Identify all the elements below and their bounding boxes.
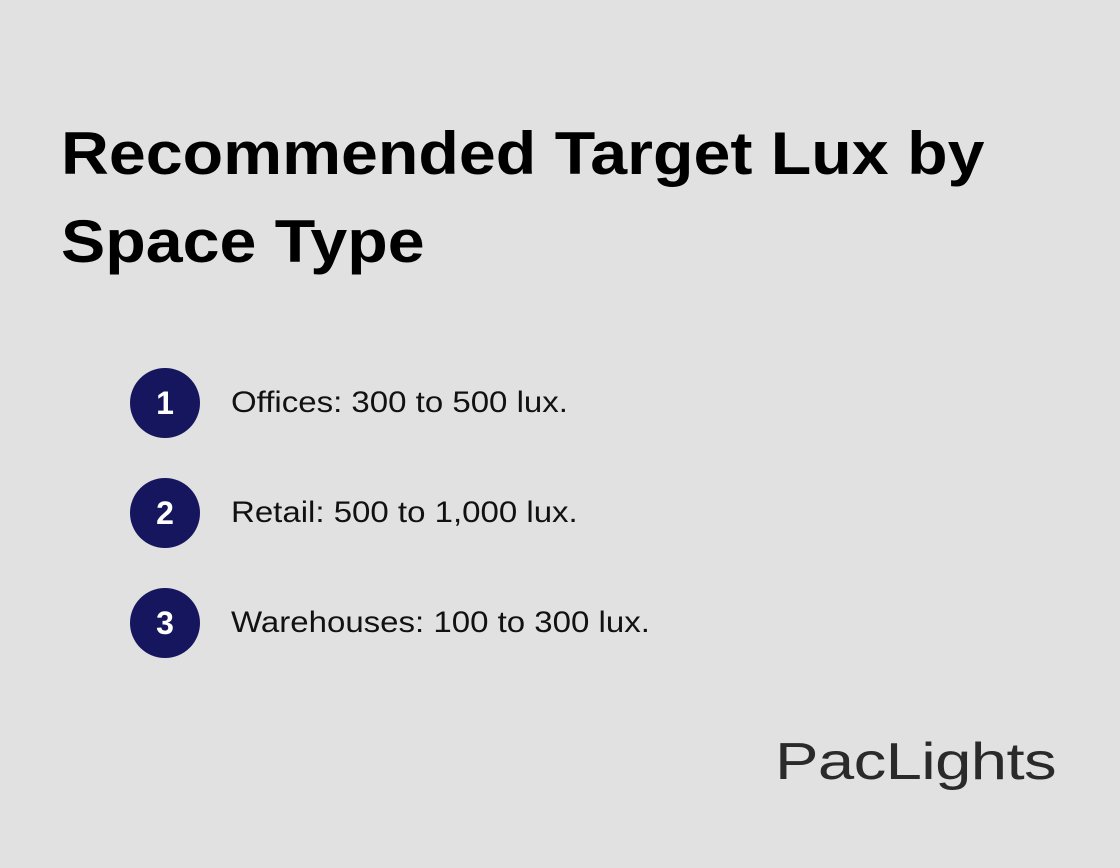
item 2 xyxy=(130,478,578,548)
item 1: Offices: 300 to 500 lux. xyxy=(231,386,568,419)
title: Recommended Target Lux by xyxy=(61,120,984,187)
title: Space Type xyxy=(61,208,425,275)
item 1: 1 xyxy=(156,385,174,421)
item 2: 2 xyxy=(156,495,174,531)
title xyxy=(61,120,984,275)
item 3: 3 xyxy=(156,605,174,641)
logo: PacLights xyxy=(775,733,1056,791)
item 3: Warehouses: 100 to 300 lux. xyxy=(231,606,650,639)
item 2: Retail: 500 to 1,000 lux. xyxy=(231,496,578,529)
item 3 xyxy=(130,588,650,658)
item 1 xyxy=(130,368,568,438)
